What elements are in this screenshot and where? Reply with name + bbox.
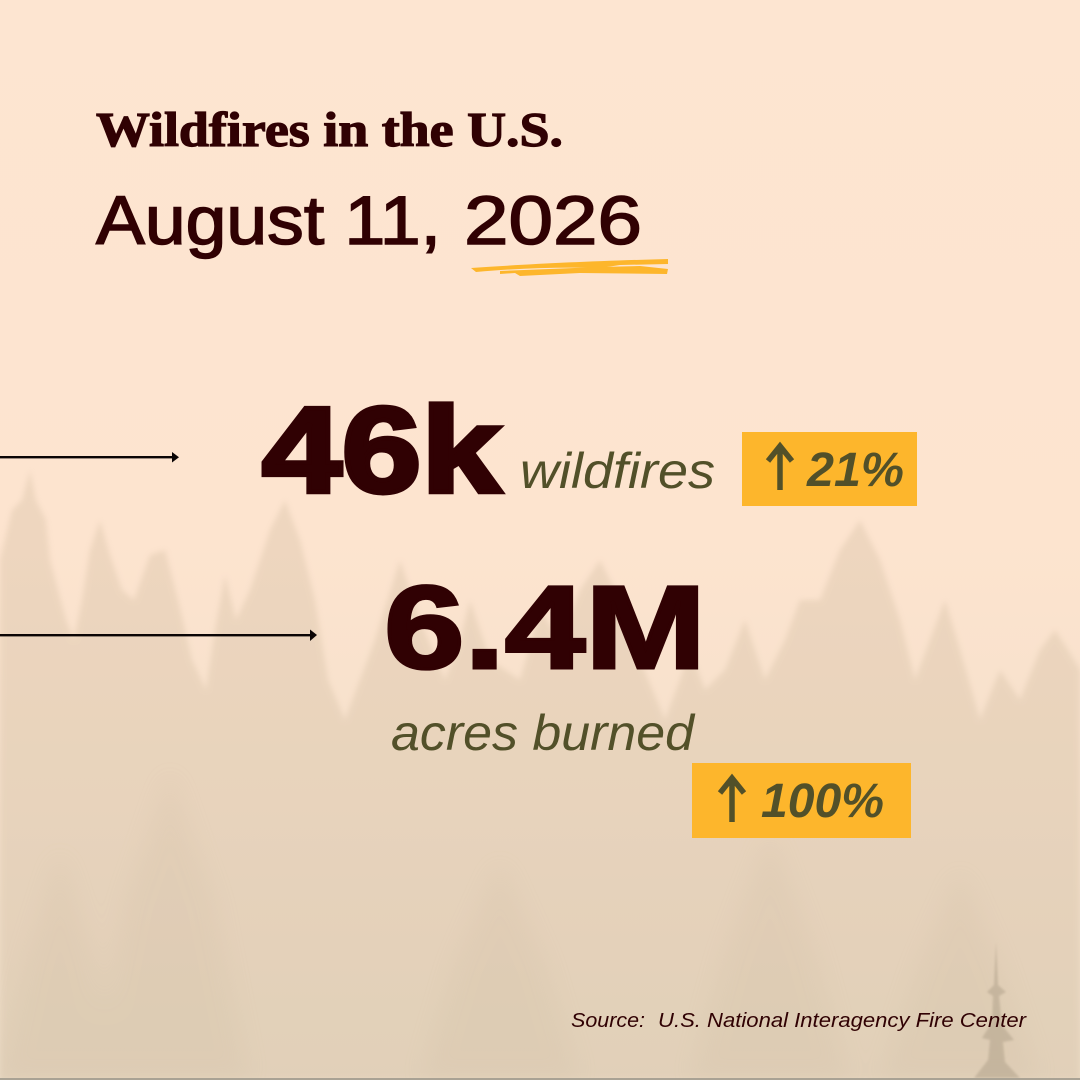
label: wildfires: wildfires	[520, 443, 715, 499]
icon: up arrow	[768, 446, 792, 490]
foreground small tree	[974, 942, 1020, 1078]
number: 6.4M: 6.4M	[384, 562, 706, 694]
stat: 6.4M acres burned	[384, 562, 706, 761]
distant tree line	[0, 470, 1080, 1080]
yellow brush underline	[471, 259, 668, 276]
icon: up arrow	[720, 778, 744, 822]
badge: up 100%: 100%	[761, 775, 884, 828]
badge: up 21%: 21%	[806, 444, 904, 497]
date heading	[96, 182, 642, 259]
label: acres burned: acres burned	[391, 705, 696, 761]
badge: up 100%	[692, 763, 911, 838]
date heading: 2026	[464, 182, 642, 259]
arrow: wildfires	[0, 452, 179, 462]
date heading: August 11,	[96, 182, 441, 259]
badge: up 21%	[742, 432, 917, 506]
number: 46k: 46k	[262, 382, 501, 518]
source note: Source:	[571, 1010, 645, 1032]
source note: U.S. National Interagency Fire Center	[658, 1010, 1027, 1032]
hazy mid trees	[0, 770, 1040, 1080]
stat: 46k wildfires	[262, 382, 715, 518]
title: Wildfires in the U.S.	[96, 102, 563, 157]
arrow: acres	[0, 630, 317, 641]
